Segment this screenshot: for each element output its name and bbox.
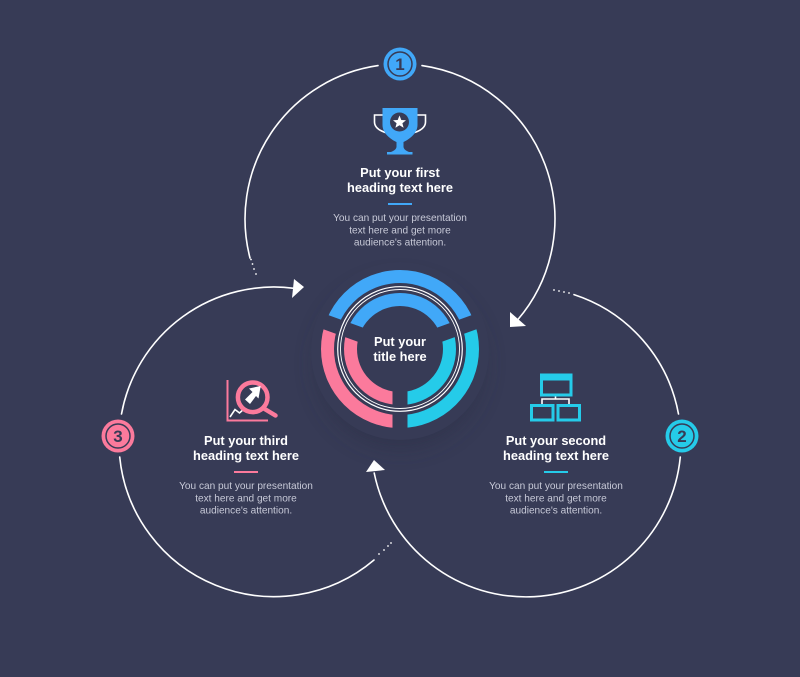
marker 3: 3 bbox=[113, 427, 123, 446]
heading: heading text here bbox=[193, 448, 299, 463]
cyan segments bbox=[408, 329, 479, 428]
marker 1: 1 bbox=[395, 55, 405, 74]
icon: trophy bbox=[374, 108, 426, 154]
pink segments bbox=[321, 329, 392, 428]
body text: text here and get more bbox=[195, 494, 297, 504]
marker 1 bbox=[384, 48, 416, 80]
centre title: title here bbox=[373, 349, 427, 364]
marker 3 bbox=[102, 420, 134, 452]
heading: Put your second bbox=[506, 433, 606, 448]
body text: text here and get more bbox=[349, 226, 451, 236]
body text: You can put your presentation bbox=[179, 481, 313, 492]
arrow: into centre from right loop bbox=[366, 460, 385, 472]
marker 2: 2 bbox=[677, 427, 687, 446]
heading: Put your first bbox=[360, 165, 440, 180]
cycle loop 2: right circle arcs bbox=[374, 289, 680, 597]
icon: magnifier over chart bbox=[228, 380, 276, 420]
body text: audience's attention. bbox=[354, 238, 446, 248]
centre ring chart bbox=[328, 276, 472, 422]
panel: first step text bbox=[333, 165, 467, 248]
body text: You can put your presentation bbox=[333, 213, 467, 224]
body text: text here and get more bbox=[505, 494, 607, 504]
centre title: Put your bbox=[374, 334, 426, 349]
heading: heading text here bbox=[347, 180, 453, 195]
centre disc with shadow bbox=[311, 262, 489, 448]
icon: network hierarchy bbox=[532, 374, 580, 420]
marker 2 bbox=[666, 420, 698, 452]
body text: audience's attention. bbox=[510, 506, 602, 516]
arrow: into centre from top loop bbox=[510, 312, 526, 327]
body text: You can put your presentation bbox=[489, 481, 623, 492]
heading: heading text here bbox=[503, 448, 609, 463]
cycle loop 3: left circle arcs bbox=[120, 287, 392, 597]
panel: second step text bbox=[489, 433, 623, 516]
body text: audience's attention. bbox=[200, 506, 292, 516]
panel: third step text bbox=[179, 433, 313, 516]
accent bar bbox=[544, 471, 568, 473]
white double ring bbox=[338, 287, 462, 411]
cycle loop 1: top circle arcs bbox=[245, 66, 555, 320]
heading: Put your third bbox=[204, 433, 288, 448]
arrow: into centre from left loop bbox=[292, 279, 304, 298]
accent bar bbox=[234, 471, 258, 473]
blue segments bbox=[328, 270, 472, 328]
accent bar bbox=[388, 203, 412, 205]
